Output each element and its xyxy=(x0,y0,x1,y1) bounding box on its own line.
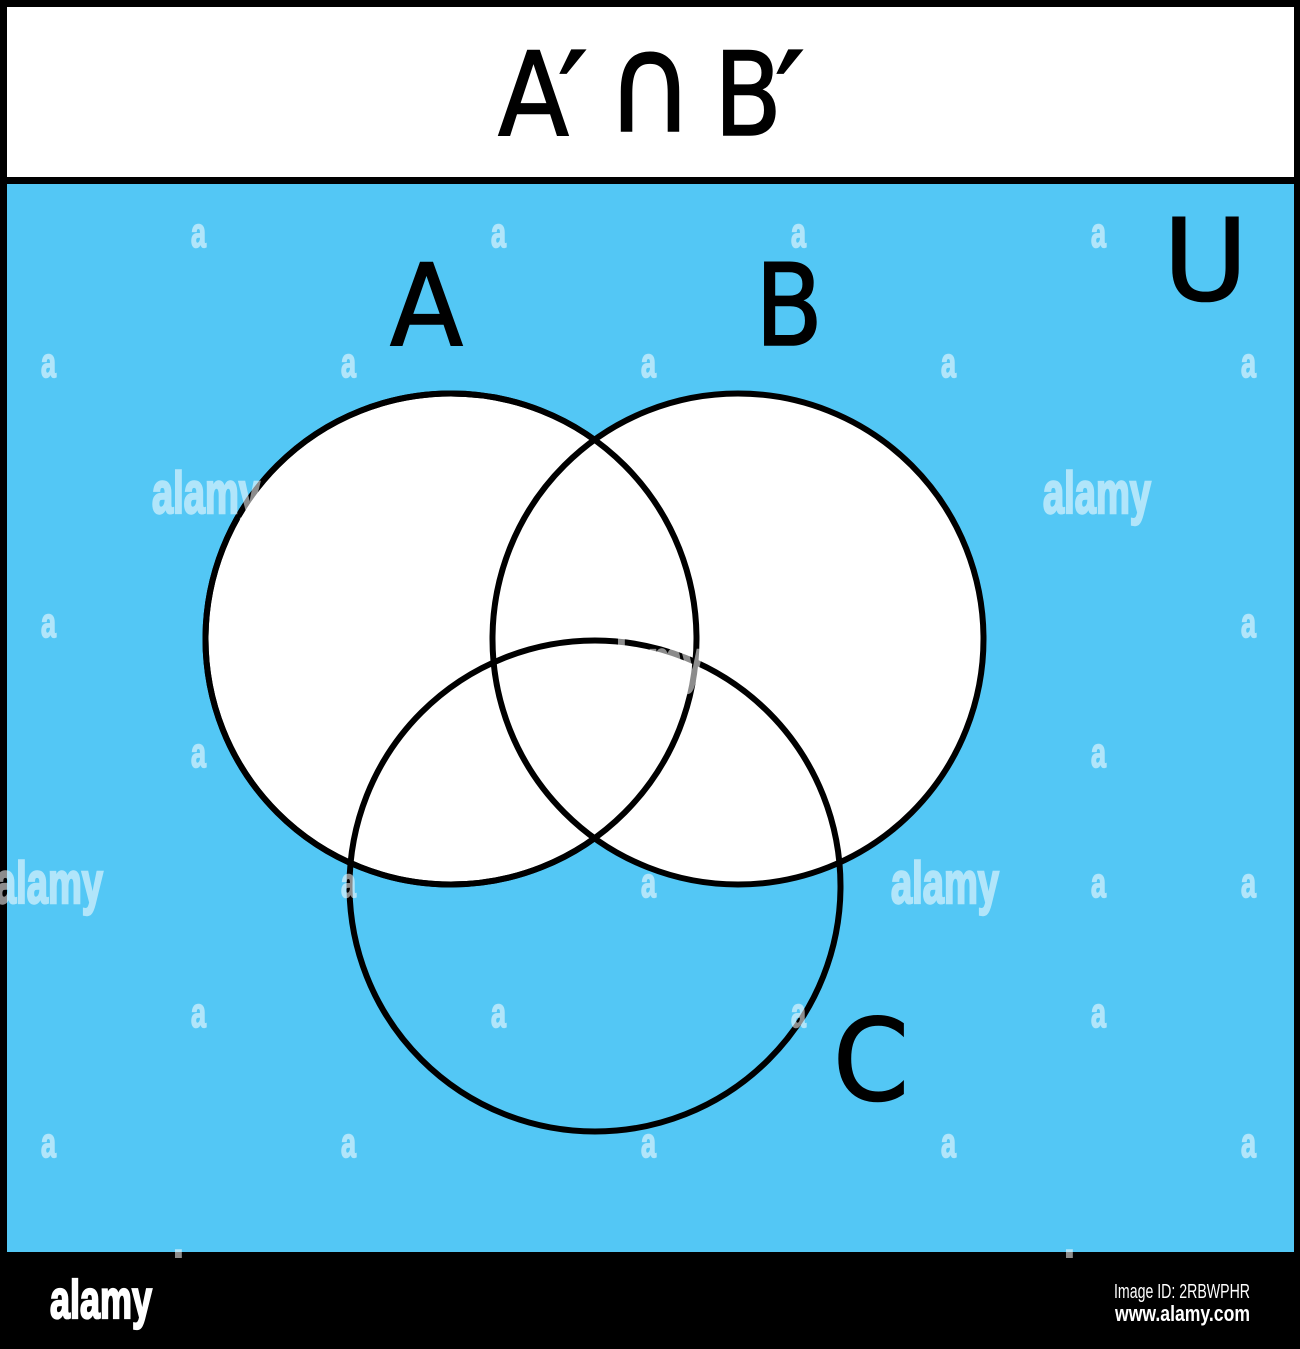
circle A outline xyxy=(206,394,696,884)
label: A: A xyxy=(390,240,463,372)
watermark pattern: a xyxy=(491,209,506,256)
circle C xyxy=(350,640,840,1132)
label: U: U xyxy=(1163,195,1248,327)
circle A xyxy=(206,394,696,884)
watermark pattern: a xyxy=(641,859,656,906)
watermark pattern: a xyxy=(1241,339,1256,386)
watermark pattern: a xyxy=(1241,599,1256,646)
watermark pattern: a xyxy=(941,339,956,386)
watermark pattern: a xyxy=(1091,859,1106,906)
panel: footer bar xyxy=(0,1258,1300,1349)
watermark pattern: a xyxy=(191,989,206,1036)
watermark pattern: a xyxy=(41,599,56,646)
watermark pattern: alamy xyxy=(1043,461,1151,526)
watermark pattern: a xyxy=(941,1119,956,1166)
footer logo: alamy xyxy=(50,1270,152,1330)
watermark pattern: a xyxy=(791,209,806,256)
title: A prime intersect B prime: ′ xyxy=(558,25,588,172)
watermark pattern: alamy xyxy=(1043,1241,1151,1306)
watermark pattern: a xyxy=(1091,989,1106,1036)
watermark pattern: a xyxy=(1241,1119,1256,1166)
watermark pattern: alamy xyxy=(152,1241,260,1306)
title: A prime intersect B prime xyxy=(498,6,805,172)
watermark pattern: a xyxy=(491,989,506,1036)
watermark pattern: a xyxy=(1091,729,1106,776)
watermark pattern: alamy xyxy=(891,851,999,916)
label: C: C xyxy=(833,995,909,1127)
watermark pattern: a xyxy=(1091,209,1106,256)
watermark pattern: a xyxy=(341,339,356,386)
watermark pattern xyxy=(0,209,1256,1306)
watermark pattern: alamy xyxy=(152,461,260,526)
watermark pattern: a xyxy=(791,989,806,1036)
watermark pattern: a xyxy=(641,1119,656,1166)
footer website: www.alamy.com xyxy=(1114,1301,1250,1326)
watermark pattern: alamy xyxy=(595,629,703,694)
watermark pattern: a xyxy=(341,1119,356,1166)
watermark pattern: a xyxy=(641,339,656,386)
watermark pattern: a xyxy=(41,339,56,386)
title: A prime intersect B prime: B xyxy=(714,28,782,163)
venn circles xyxy=(206,394,984,1132)
watermark pattern: a xyxy=(41,1119,56,1166)
label: B: B xyxy=(755,240,823,372)
title: A prime intersect B prime: ∩ xyxy=(606,6,694,164)
watermark pattern: a xyxy=(1241,859,1256,906)
watermark pattern: a xyxy=(341,859,356,906)
watermark pattern: a xyxy=(191,209,206,256)
watermark pattern: a xyxy=(191,729,206,776)
title: A prime intersect B prime: A xyxy=(498,28,569,163)
title: A prime intersect B prime: ′ xyxy=(775,25,805,172)
circle B xyxy=(492,394,984,884)
panel: title band xyxy=(7,6,1294,177)
panel: universal set background xyxy=(7,184,1294,1252)
